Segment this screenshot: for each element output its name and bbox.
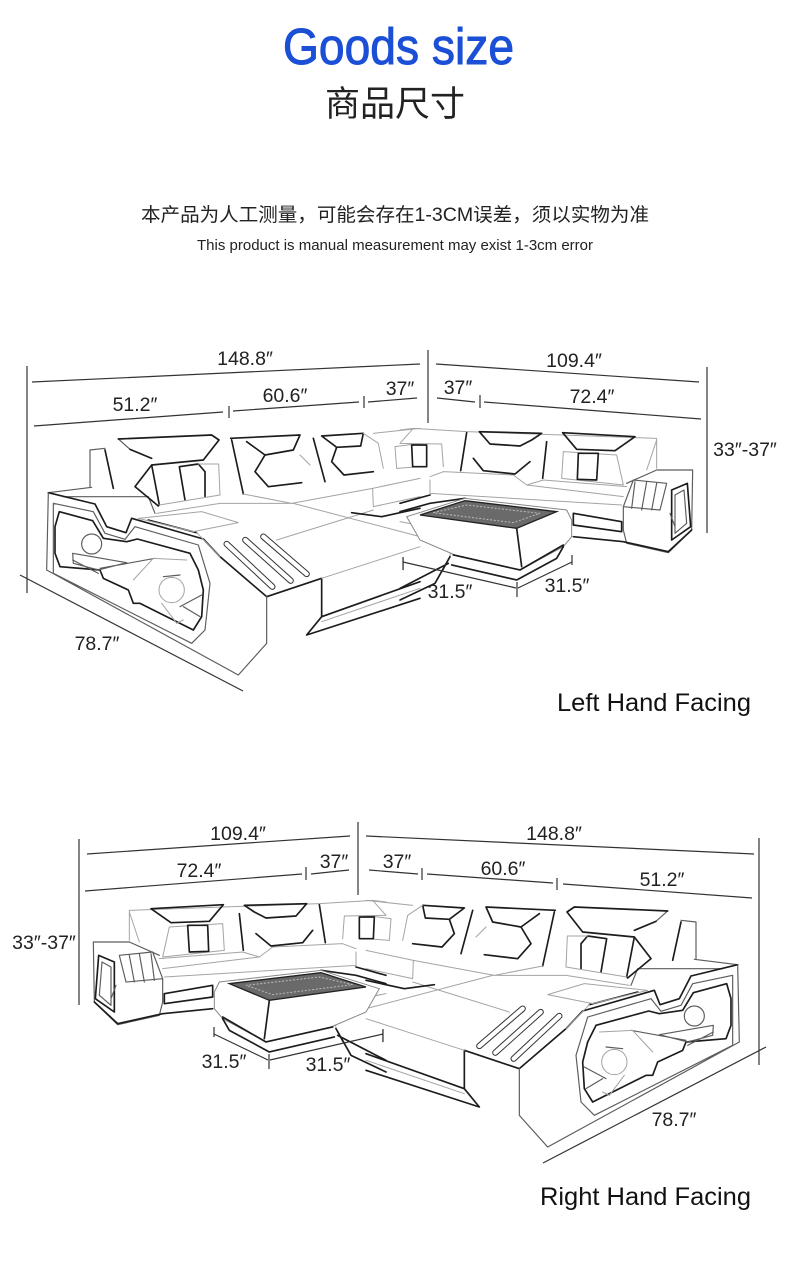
dimension labels: right hand facing: 31.5″ [202, 1051, 247, 1073]
dimension labels: left hand facing: 37″ [444, 377, 472, 399]
chaise end [400, 522, 452, 570]
dimension labels: right hand facing: 109.4″ [210, 823, 266, 845]
chaise vents [227, 537, 307, 587]
dimension labels: left hand facing: 31.5″ [545, 575, 590, 597]
title: Goods size: Goods size [283, 18, 514, 75]
window openings with ornaments [55, 512, 203, 630]
caption: Left Hand Facing: Left Hand Facing [557, 689, 751, 717]
dimension labels: right hand facing: 148.8″ [526, 823, 582, 845]
dimension labels: right hand facing: 33″-37″ [12, 932, 76, 954]
dimension labels: left hand facing [75, 348, 777, 655]
note in Chinese: 本产品为人工测量，可能会存在1-3CM误差，须以实物为准 [141, 204, 649, 226]
dimension labels: left hand facing: 109.4″ [546, 350, 602, 372]
dimension lines: left hand facing [20, 350, 707, 691]
coffee table and right section [400, 428, 693, 600]
dimension labels: right hand facing: 78.7″ [652, 1109, 697, 1131]
sofa drawing: right hand facing [93, 900, 739, 1147]
dimension labels: left hand facing: 78.7″ [75, 633, 120, 655]
chaise and left backrest [47, 428, 420, 675]
dimension labels: left hand facing: 37″ [386, 378, 414, 400]
dimension labels: left hand facing: 51.2″ [113, 394, 158, 416]
dimension labels: right hand facing [12, 823, 697, 1131]
subtitle: Chinese title: 商品尺寸 [325, 85, 465, 124]
dimension labels: left hand facing: 60.6″ [263, 385, 308, 407]
dimension labels: left hand facing: 33″-37″ [713, 439, 777, 461]
dimension labels: right hand facing: 31.5″ [306, 1054, 351, 1076]
dimension labels: right hand facing: 51.2″ [640, 869, 685, 891]
dimension labels: left hand facing: 72.4″ [570, 386, 615, 408]
dimension labels: right hand facing: 60.6″ [481, 858, 526, 880]
note in English: This product is manual measurement may exist 1-3cm error [197, 238, 593, 254]
caption: Right Hand Facing: Right Hand Facing [540, 1183, 751, 1211]
dimension labels: right hand facing: 37″ [320, 851, 348, 873]
coffee table [407, 498, 572, 570]
sofa drawing: left hand facing [47, 428, 693, 675]
dimension labels: right hand facing: 72.4″ [177, 860, 222, 882]
dimension labels: left hand facing: 31.5″ [428, 581, 473, 603]
dimension lines: right hand facing [79, 822, 766, 1163]
dimension labels: right hand facing: 37″ [383, 851, 411, 873]
dimension labels: left hand facing: 148.8″ [217, 348, 273, 370]
